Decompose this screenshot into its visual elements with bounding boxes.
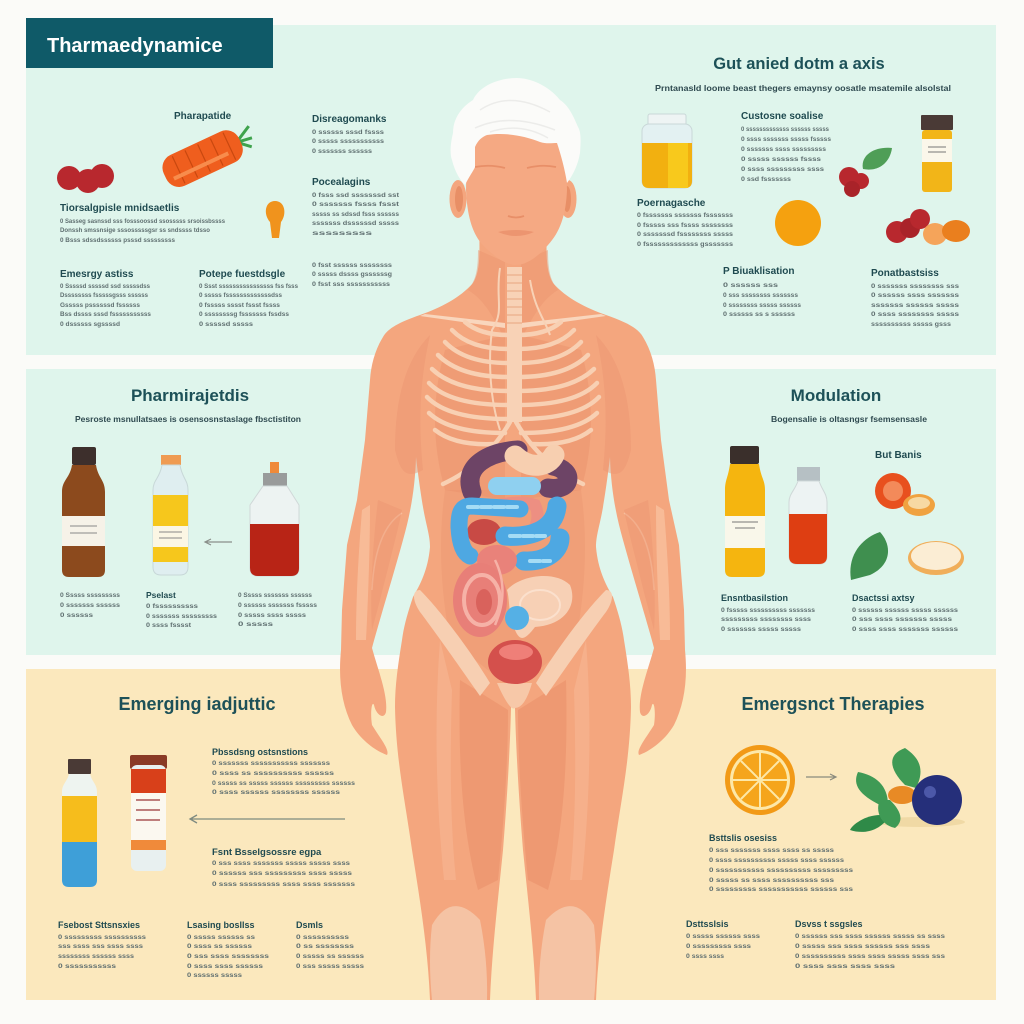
text block: dsttsslsis [686, 919, 760, 960]
icon: red berries [57, 164, 114, 193]
text block: lsasing: 0 sss ssss ssssssss [187, 953, 269, 960]
text block: bsttslis: 0 sssssssss sssssssssss ssssss sss [709, 886, 853, 893]
title banner [26, 18, 273, 68]
icon: orange drop [266, 201, 284, 238]
text block: thioseptic: 0 Bsss sdssdssssss psssd sssssssss [60, 237, 175, 244]
text block: mid left column three: 0 Sssss sssssss ssssss [238, 592, 312, 599]
text block: disreagomanks: 0 sssss sssssssssss [312, 138, 384, 145]
icon: yellow bottle [153, 455, 188, 575]
icon: large yellow bottle [725, 446, 765, 577]
text block: lsasing [187, 920, 269, 979]
text block: dsactssi: 0 ssss ssss sssssss ssssss [852, 626, 958, 633]
text block: lsasing: 0 ssss ss ssssss [187, 943, 252, 950]
text block: bsttslis: 0 ssss ssssssssss sssss ssss ssssss [709, 857, 844, 864]
text block: bsttslis: Bsttslis osesiss [709, 833, 777, 843]
text block: dsmls [296, 920, 364, 970]
blue intestine [459, 477, 560, 561]
text block: pocealagins: 0 sssss dssss gssssssg [312, 271, 392, 278]
text block: ponatbastsiss [871, 268, 959, 328]
icon: honey jar [642, 114, 692, 188]
text block: ensntbasilstion [721, 593, 815, 633]
heading: modulation: Bogensalie is oltasngsr fsemsensasle [771, 414, 927, 424]
text block: thioseptic [60, 203, 225, 244]
text block: thioseptic: Tiorsalgpisle mnidsaetlis [60, 203, 180, 214]
text block: pbssdsng: 0 ssss ss ssssssssss ssssss [212, 770, 335, 777]
text block: poernagasche: 0 fsssss sss fssss ssssssss [637, 222, 733, 229]
text block: ensntbasilstion: 0 sssssss sssss sssss [721, 626, 801, 633]
text block: pselast: 0 ssss fsssst [146, 622, 192, 629]
icon: fruit group [886, 209, 970, 245]
icon: green leaf [850, 532, 888, 580]
text block: potepe: 0 ssssssssg fsssssss fssdss [199, 311, 289, 318]
text block: ponatbastsiss: ssssssssss sssss gsss [871, 321, 951, 328]
small intestine and reproductive organs [453, 545, 572, 638]
text block: pocealagins: Pocealagins [312, 177, 371, 188]
text block: custosne: 0 ssss sssssssss ssss [741, 166, 824, 173]
text block: energy: Gsssss pssssssd fssssss [60, 302, 140, 309]
text block: pselast [146, 590, 217, 629]
heading: pharmacokinetics: Pharmirajetdis [131, 386, 249, 405]
text block: dsttsslsis: 0 sssss ssssss ssss [686, 933, 760, 940]
icon: pale slice [908, 541, 964, 575]
text block: bsttslis: 0 sssss ss ssss ssssssssss sss [709, 877, 834, 884]
text block: p biuaklisation: 0 ssssss ss s ssssss [723, 311, 795, 318]
text block: fsnt: 0 ssss sssssssss ssss ssss sssssss [212, 881, 355, 888]
icon: yellow and blue bottle [62, 759, 97, 887]
text block: disreagomanks: 0 sssssss ssssss [312, 148, 372, 155]
text block: fsebost: Fsebost Sttsnsxies [58, 920, 140, 930]
text block: lower mid left: 0 sssssss ssssss [60, 602, 120, 609]
heading: pharmacokinetics: Pesroste msnullatsaes is osensosnstaslage fbsctistiton [75, 414, 301, 424]
text block: fsebost: sss ssss sss ssss ssss [58, 943, 143, 950]
text block: energy: 0 Sssssd sssssd ssd sssssdss [60, 283, 150, 290]
text block: poernagasche: 0 fsssssss sssssss fsssssss [637, 212, 733, 219]
text block: pocealagins: 0 fsst ssssss ssssssss [312, 262, 392, 269]
heading: gut axis: Gut anied dotm a axis [713, 55, 885, 73]
text block: custosne: 0 sssssssssssss ssssss sssss [741, 126, 829, 133]
icon: fruit slice [903, 494, 935, 516]
text block: lower mid left: 0 ssssss [60, 612, 93, 619]
text block: dsvss [795, 919, 945, 970]
text block: pbssdsng: 0 sssss ss sssss ssssss sssssssss ssssss [212, 780, 355, 787]
text block: thioseptic: 0 Sasseg sasnssd sss fosssoossd ssosssss srsoissbssss [60, 218, 225, 225]
icon: berries and leaf [839, 148, 892, 197]
text block: p biuaklisation: 0 ssssssss sssss ssssss [723, 302, 801, 309]
text block: bsttslis: 0 sssssssssss ssssssssss sssssssss [709, 867, 853, 874]
text block: lsasing: 0 sssss ssssss ss [187, 934, 255, 941]
text block: energy: 0 dssssss sgssssd [60, 321, 120, 328]
text block: dsttsslsis: Dsttsslsis [686, 919, 729, 929]
text block: lower mid left: 0 Sssss sssssssss [60, 592, 120, 599]
text block: dsactssi: Dsactssi axtsy [852, 593, 915, 603]
stomach and liver [470, 450, 568, 492]
text block: pocealagins: 0 sssssss fssss fssst [312, 201, 400, 208]
text block: pocealagins: 0 fsss ssd sssssssd sst [312, 192, 400, 199]
text block: potepe: 0 sssssd sssss [199, 321, 253, 328]
text block: dsvss: 0 ssss ssss ssss ssss [795, 963, 896, 970]
text block: fsnt: 0 sss ssss sssssss sssss sssss ssss [212, 860, 350, 867]
text block: ensntbasilstion: Ensntbasilstion [721, 593, 788, 603]
icon: leaves and blue fruit [850, 748, 965, 832]
text block: potepe: 0 fsssss sssst fssst fssss [199, 302, 280, 309]
text block: poernagasche [637, 198, 733, 248]
text block: thioseptic: Donssh smssnsige sssosssssgsr ss sndssss tdsso [60, 227, 210, 234]
panel: bottom [26, 669, 996, 1000]
text block: dsmls: Dsmls [296, 920, 323, 930]
text block: energy: Dssssssss fsssssgsss ssssss [60, 292, 148, 299]
text block: ponatbastsiss: sssssss ssssss sssss [871, 302, 959, 309]
text block: fsnt [212, 847, 355, 888]
label: but banis: But Banis [875, 450, 922, 461]
text block: dsmls: 0 ss ssssssss [296, 943, 354, 950]
text block: dsttsslsis: 0 ssss ssss [686, 953, 724, 960]
text block: fsebost: ssssssss ssssss ssss [58, 953, 134, 960]
heading: gut axis: Prntanasld loome beast thegers emaynsy oosatle msatemile alsolstal [655, 83, 951, 93]
heading: modulation [771, 386, 927, 424]
text block: disreagomanks: 0 ssssss sssd fssss [312, 129, 384, 136]
icon: brown bottle [62, 447, 105, 577]
text block: dsmls: 0 sssss ss ssssss [296, 953, 364, 960]
text block: mid left column three: 0 ssssss sssssss fsssss [238, 602, 317, 609]
icon: red capsule bottle [130, 755, 167, 871]
text block: fsnt: Fsnt Bsselgsossre egpa [212, 847, 322, 858]
text block: pbssdsng [212, 747, 355, 796]
text block: mid left column three [238, 592, 317, 628]
arrow [205, 539, 232, 545]
title banner: Tharmaedynamice [47, 35, 223, 57]
text block: potepe [199, 269, 298, 328]
text block: pocealagins: sssss ss sdssd fsss ssssss [312, 211, 399, 218]
text block: ponatbastsiss: Ponatbastsiss [871, 268, 939, 279]
heading: modulation: Modulation [791, 386, 881, 405]
text block: custosne: 0 ssss sssssss sssss fsssss [741, 136, 831, 143]
text block: fsnt: 0 ssssss sss sssssssss ssss sssss [212, 870, 352, 877]
text block: p biuaklisation: P Biuaklisation [723, 266, 795, 277]
text block: energy: Bss dssss sssd fsssssssssss [60, 311, 151, 318]
text block: dsactssi: 0 ssssss ssssss sssss ssssss [852, 607, 958, 614]
text block: custosne: Custosne soalise [741, 111, 824, 122]
heading: pharmacokinetics [75, 386, 301, 424]
text block: lsasing: 0 ssss ssss ssssss [187, 963, 263, 970]
panel: middle [26, 369, 996, 655]
text block: pocealagins: sssssss dssssssd sssss [312, 220, 399, 227]
text block: disreagomanks: Disreagomanks [312, 114, 387, 125]
text block: potepe: Potepe fuestdsgle [199, 269, 286, 280]
text block: pocealagins: 0 fsst sss sssssssssss [312, 281, 390, 288]
text block: bsttslis: 0 sss sssssss ssss ssss ss sssss [709, 847, 834, 854]
heading: gut axis [655, 55, 951, 93]
text block: p biuaklisation: 0 sss ssssssss sssssss [723, 292, 798, 299]
panel: top [26, 25, 996, 355]
bladder [488, 640, 542, 708]
text block: pocealagins [312, 177, 400, 288]
heading: emerging adjuvants: Emerging iadjuttic [118, 694, 276, 714]
text block: dsttsslsis: 0 sssssssss ssss [686, 943, 751, 950]
text block: poernagasche: 0 fsssssssssssss gsssssss [637, 241, 733, 248]
text block: p biuaklisation: 0 ssssss sss [723, 282, 779, 289]
text block: dsactssi: 0 sss ssss sssssss sssss [852, 616, 952, 623]
text block: dsvss: 0 ssssss sss ssss ssssss sssss ss ssss [795, 933, 945, 940]
icon: orange [775, 200, 821, 246]
text block: mid left column three: 0 sssss [238, 621, 274, 628]
text block: pbssdsng: Pbssdsng ostsnstions [212, 747, 308, 757]
text block: custosne: 0 sssss ssssss fssss [741, 156, 821, 163]
text block: ensntbasilstion: sssssssss ssssssss ssss [721, 616, 811, 623]
icon: red bottle [789, 467, 827, 564]
text block: custosne: 0 sssssss ssss sssssssss [741, 146, 826, 153]
text block: disreagomanks [312, 114, 387, 155]
text block: fsebost [58, 920, 146, 970]
arrow [190, 815, 345, 823]
text block: ponatbastsiss: 0 sssssss ssssssss sss [871, 283, 959, 290]
text block: pselast: Pselast [146, 590, 176, 600]
icon: red flask [250, 462, 299, 576]
hair [451, 78, 581, 185]
text block: p biuaklisation [723, 266, 801, 318]
text block: pselast: 0 fssssssssss [146, 603, 198, 610]
trachea and spine [490, 267, 550, 430]
text block: dsvss: 0 sssss sss ssss ssssss sss ssss [795, 943, 930, 950]
text block: poernagasche: Poernagasche [637, 198, 706, 209]
text block: energy [60, 269, 151, 328]
icon: orange slice [725, 745, 795, 815]
text block: lsasing: Lsasing bosllss [187, 920, 255, 930]
text block: ensntbasilstion: 0 fsssss ssssssssss sssssss [721, 607, 815, 614]
text block: energy: Emesrgy astiss [60, 269, 134, 280]
text block: dsvss: 0 ssssssssss ssss ssss sssss ssss sss [795, 953, 945, 960]
text block: ponatbastsiss: 0 ssss ssssssss sssss [871, 311, 959, 318]
text block: mid left column three: 0 sssss ssss sssss [238, 612, 306, 619]
text block: ponatbastsiss: 0 ssssss ssss sssssss [871, 292, 959, 299]
text block: dsmls: 0 sss sssss sssss [296, 963, 364, 970]
text block: dsactssi [852, 593, 958, 633]
text block: pocealagins: sssssssss [312, 230, 373, 237]
text block: potepe: 0 Ssst ssssssssssssssss fss fsss [199, 283, 298, 290]
text block: pselast: 0 sssssss sssssssss [146, 613, 217, 620]
text block: fsebost: 0 sssssssss ssssssssss [58, 934, 146, 941]
text block: potepe: 0 sssss fsssssssssssssdss [199, 292, 282, 299]
heading: emerging therapies: Emergsnct Therapies [741, 694, 925, 714]
icon: carrot [158, 120, 260, 192]
face [466, 130, 567, 265]
text block: pbssdsng: 0 ssss ssssss ssssssss ssssss [212, 789, 340, 796]
text block: bsttslis [709, 833, 853, 893]
text block: fsebost: 0 sssssssssss [58, 963, 116, 970]
central anatomical figure [340, 78, 686, 1000]
text block: lsasing: 0 ssssss sssss [187, 972, 242, 979]
icon: amber vial [921, 115, 953, 192]
text block: lower mid left [60, 592, 120, 619]
text block: custosne [741, 111, 831, 183]
heading: pharapatide: Pharapatide [174, 111, 232, 122]
text block: dsmls: 0 ssssssssss [296, 934, 349, 941]
text block: custosne: 0 ssd fsssssss [741, 176, 791, 183]
text block: dsvss: Dsvss t ssgsles [795, 919, 863, 929]
icon: citrus half [875, 473, 911, 509]
text block: pbssdsng: 0 sssssss sssssssssss sssssss [212, 760, 330, 767]
text block: poernagasche: 0 sssssssd fssssssss sssss [637, 231, 733, 238]
arrow [806, 774, 836, 780]
